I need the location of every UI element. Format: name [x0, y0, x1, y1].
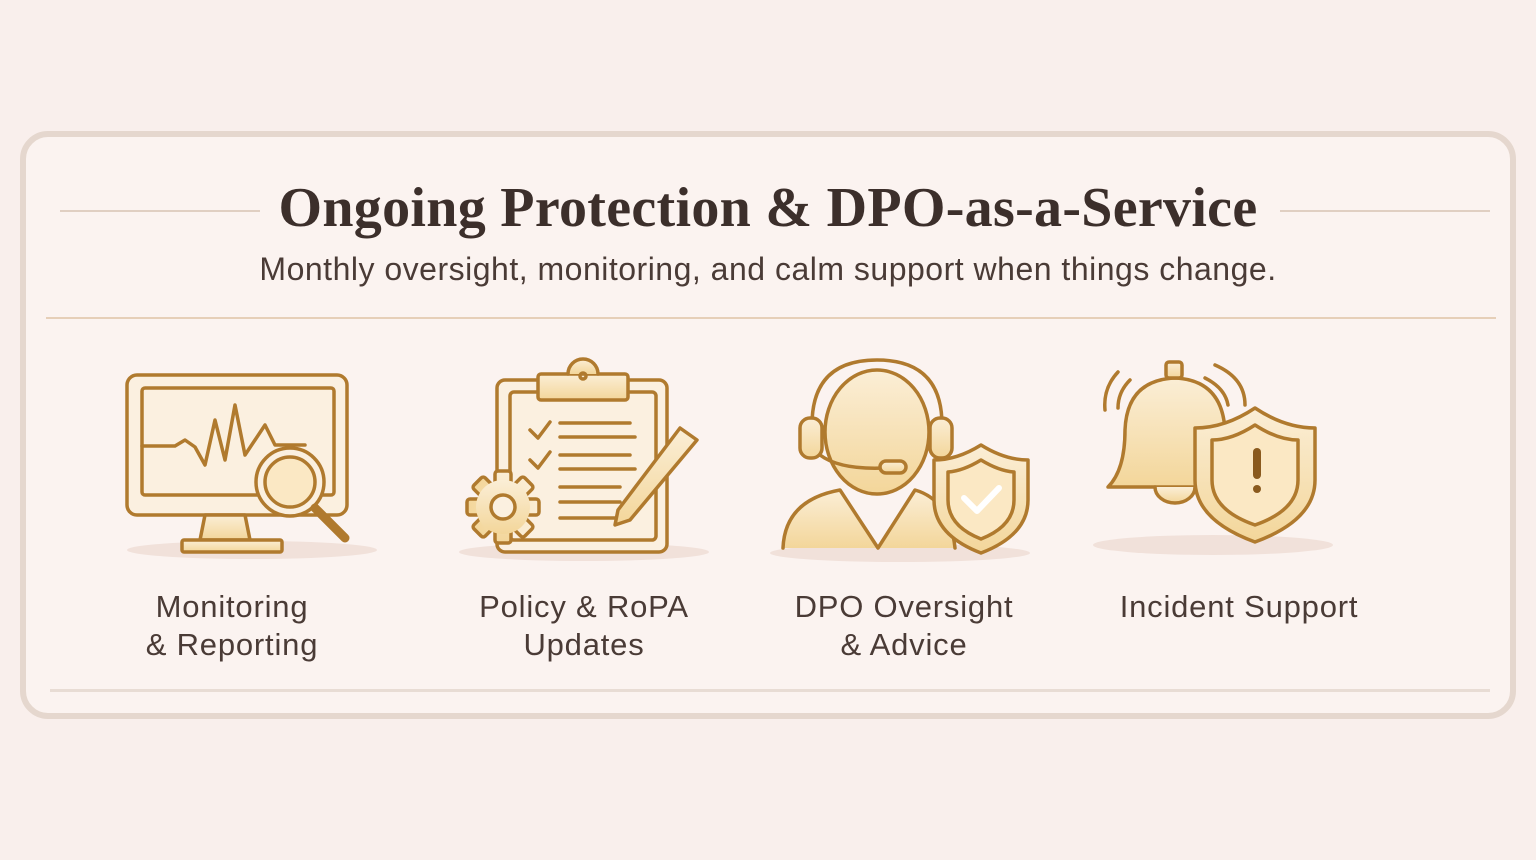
- label: policy: [479, 589, 689, 662]
- label: monitoring: [146, 589, 318, 662]
- icon: bell with warning shield: [1093, 362, 1333, 555]
- label: dpo: & Advice: [840, 627, 968, 662]
- icon: monitor with magnifier: [127, 375, 377, 559]
- icon: clipboard with gear and pencil: [459, 359, 709, 561]
- label: policy: Policy & RoPA: [479, 589, 689, 624]
- label: dpo: [795, 589, 1013, 662]
- title: Ongoing Protection & DPO-as-a-Service: [278, 177, 1258, 239]
- label: monitoring: Monitoring: [156, 589, 308, 624]
- label: dpo: DPO Oversight: [795, 589, 1013, 624]
- label: policy: Updates: [523, 627, 645, 662]
- panel: main card: [20, 131, 1516, 719]
- label: incident: Incident Support: [1120, 589, 1358, 624]
- icon: headset person with shield: [770, 360, 1030, 562]
- subtitle: Monthly oversight, monitoring, and calm support when things change.: [259, 251, 1277, 287]
- label: monitoring: & Reporting: [146, 627, 318, 662]
